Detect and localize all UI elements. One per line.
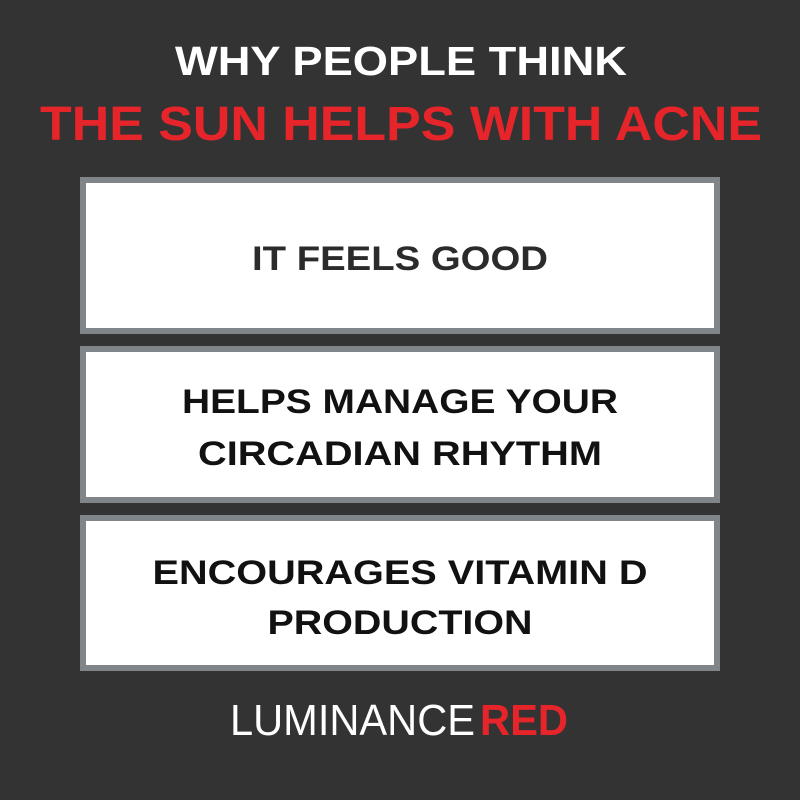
panel: it feels good: IT FEELS GOOD — [252, 240, 548, 278]
logo: RED — [480, 696, 568, 745]
title — [40, 38, 762, 151]
title: THE SUN HELPS WITH ACNE — [40, 98, 762, 151]
logo: LUMINANCE — [230, 696, 475, 745]
panel: circadian rhythm — [83, 349, 717, 500]
panel: vitamin d: PRODUCTION — [268, 604, 532, 642]
panel: circadian rhythm: HELPS MANAGE YOUR — [182, 383, 618, 421]
panel: vitamin d: ENCOURAGES VITAMIN D — [152, 554, 648, 592]
title: WHY PEOPLE THINK — [175, 38, 627, 84]
panel: it feels good — [83, 180, 717, 331]
panel: vitamin d — [83, 518, 717, 668]
panel: circadian rhythm: CIRCADIAN RHYTHM — [198, 435, 602, 473]
